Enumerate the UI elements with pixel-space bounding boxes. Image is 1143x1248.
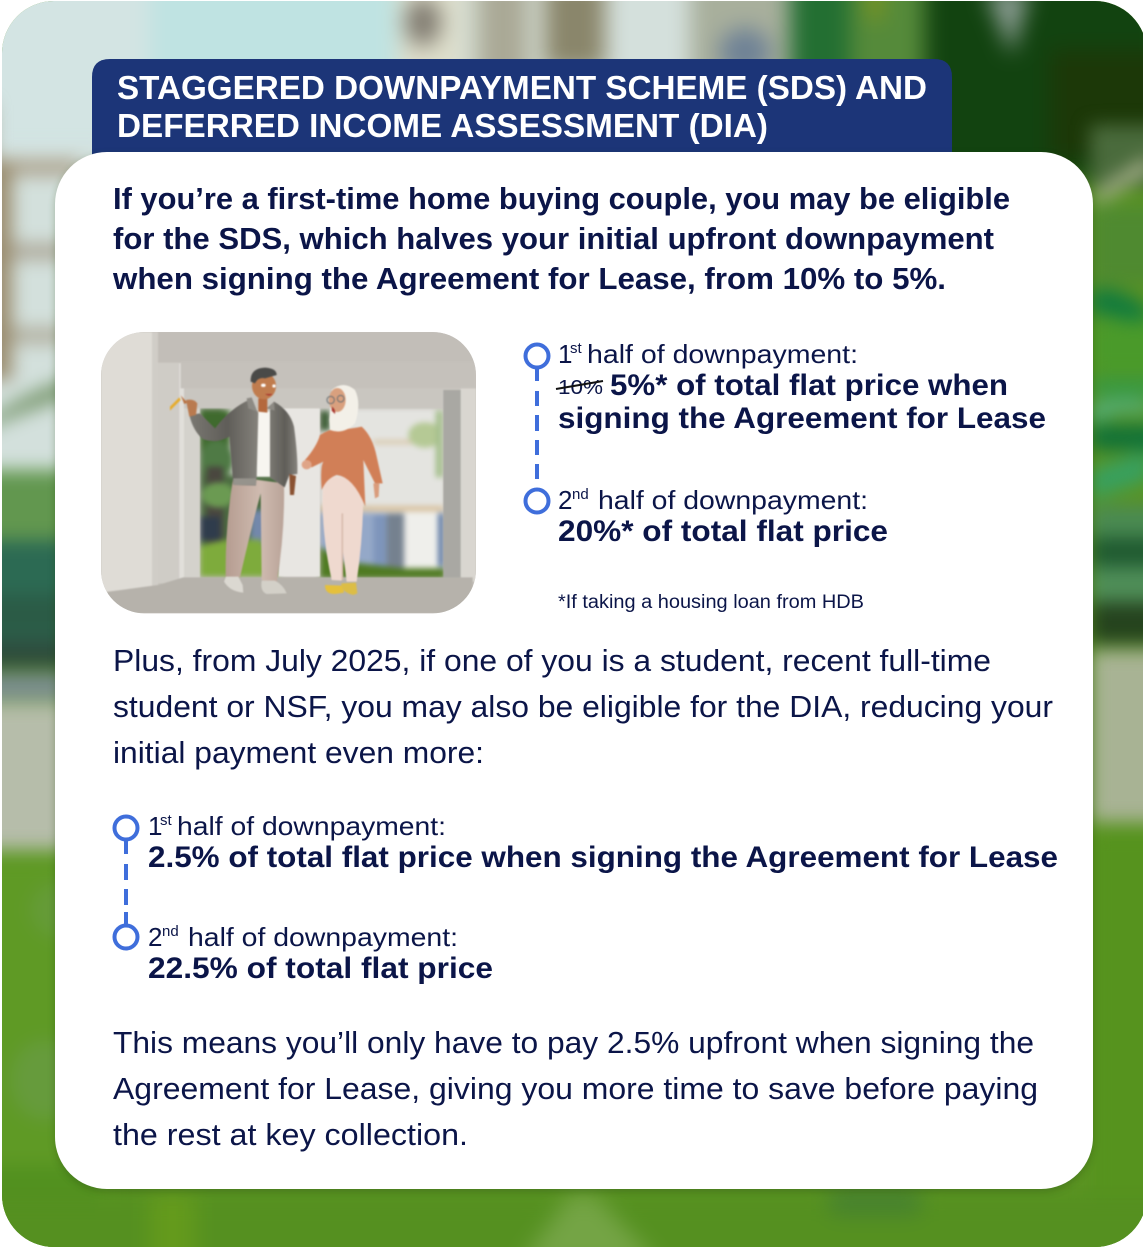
scenery through openings, soft focus [200,408,445,578]
timeline: DIA payment steps [114,811,1058,985]
step: second half DIA: 22.5% of total flat price [148,952,493,985]
step: second half SDS: nd [572,486,589,503]
step: first half SDS [556,339,1046,435]
man [170,368,297,594]
step: first half SDS: signing the Agreement for Lease [558,402,1046,435]
right strip [1090,125,1143,185]
step: second half DIA [148,922,493,985]
step: second half SDS: 20%* of total flat price [558,515,888,548]
step: first half SDS: 5%* of total flat price when [610,369,1008,402]
DIA paragraph: initial payment even more: [113,735,484,770]
footnote: *If taking a housing loan from HDB [558,592,864,613]
closing paragraph: This means you’ll only have to pay 2.5% upfront when signing the [113,1025,1034,1060]
step: first half DIA: half of downpayment: [177,811,446,841]
closing paragraph: the rest at key collection. [113,1117,468,1152]
intro text: when signing the Agreement for Lease, from 10% to 5%. [112,261,946,296]
left strip [2,214,55,484]
woman [302,385,383,595]
step: first half SDS: st [570,340,582,357]
heading text [117,69,927,144]
step: first half SDS: 1 [558,339,572,369]
step: second half SDS: half of downpayment: [598,485,868,515]
timeline marker: DIA line and nodes [114,816,138,948]
heading text: DEFERRED INCOME ASSESSMENT (DIA) [117,107,768,144]
illustration: couple with key at void deck [101,332,476,613]
step: first half DIA: 1 [148,811,162,841]
step: second half DIA: half of downpayment: [188,922,458,952]
step: first half DIA [148,811,1058,874]
intro text: for the SDS, which halves your initial upfront downpayment [113,221,994,256]
timeline: SDS payment steps [526,339,1046,548]
step: second half DIA: nd [162,923,179,940]
DIA paragraph [113,643,1053,770]
heading text: STAGGERED DOWNPAYMENT SCHEME (SDS) AND [117,69,927,106]
DIA paragraph: Plus, from July 2025, if one of you is a student, recent full-time [113,643,991,678]
DIA paragraph: student or NSF, you may also be eligible for the DIA, reducing your [113,689,1053,724]
step: second half SDS [558,485,888,548]
step: first half DIA: st [160,812,172,829]
void deck structure [101,332,476,613]
closing paragraph: Agreement for Lease, giving you more time to save before paying [113,1071,1038,1106]
heading banner [92,59,952,160]
closing paragraph [113,1025,1038,1152]
intro text: If you’re a first-time home buying couple, you may be eligible [113,181,1010,216]
step: first half SDS: half of downpayment: [587,339,858,369]
timeline marker: SDS line and nodes [526,344,548,512]
step: second half SDS: 2 [558,485,572,515]
panel: main white card [55,152,1093,1192]
intro text [112,181,1010,296]
step: first half SDS: 10% [558,377,603,399]
step: second half DIA: 2 [148,922,162,952]
step: first half DIA: 2.5% of total flat price when signing the Agreement for Lease [148,841,1058,874]
